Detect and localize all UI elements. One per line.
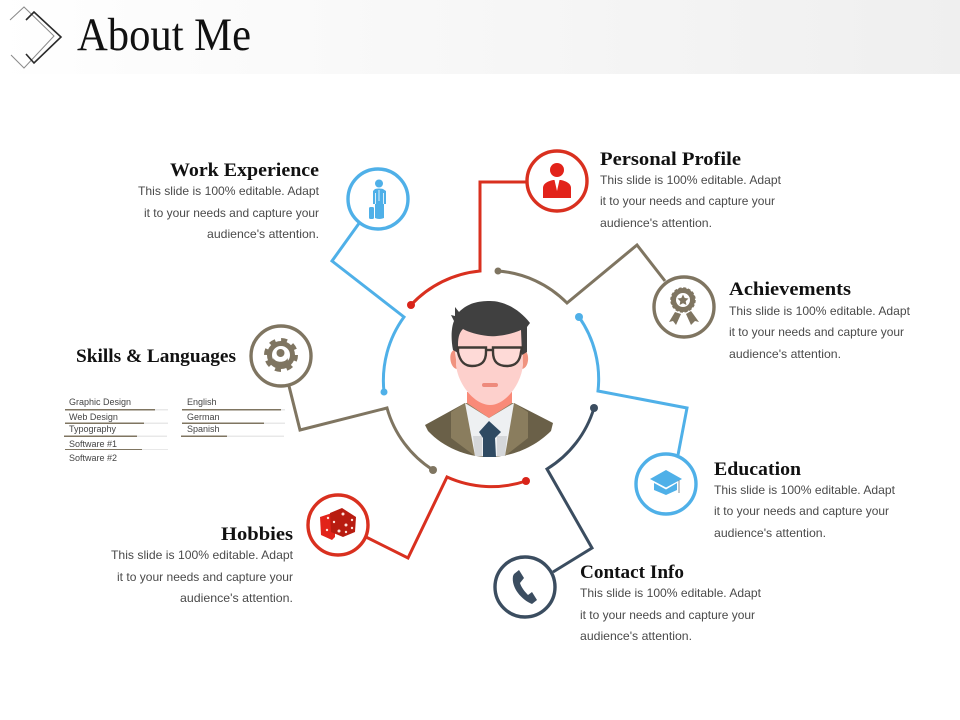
skills bars	[64, 397, 168, 463]
text block: achievements	[729, 280, 911, 361]
connector: hobbies (red)	[366, 477, 530, 558]
text block: work experience: audience's attention.	[207, 227, 319, 241]
text block: personal profile	[600, 150, 782, 230]
skills bars: Software #1	[69, 439, 117, 449]
text block: personal profile: This slide is 100% editable. Adapt	[600, 173, 782, 187]
mouth	[482, 383, 498, 387]
text block: education: Education	[714, 460, 802, 480]
text block: hobbies	[111, 525, 294, 605]
icon: education	[636, 454, 696, 514]
text block: education	[714, 460, 896, 540]
text block: work experience	[138, 161, 320, 241]
title: About Me	[77, 10, 251, 61]
heading: skills and languages: Skills & Languages	[76, 347, 236, 367]
connector: achievements (brown)	[494, 245, 665, 303]
text block: work experience: it to your needs and capture your	[144, 206, 319, 220]
text block: personal profile: audience's attention.	[600, 216, 712, 230]
connector: skills (brown)	[289, 386, 437, 474]
header band	[0, 0, 960, 74]
central portrait	[425, 301, 553, 457]
text block: education: This slide is 100% editable. Adapt	[714, 483, 896, 497]
text block: education: it to your needs and capture your	[714, 504, 889, 518]
text block: education: audience's attention.	[714, 526, 826, 540]
language bars: German	[187, 412, 220, 422]
text block: work experience: This slide is 100% editable. Adapt	[138, 184, 320, 198]
icon: hobbies dice	[308, 495, 368, 555]
glasses	[458, 348, 522, 366]
text block: achievements: Achievements	[729, 280, 851, 300]
icon: achievements	[654, 277, 714, 337]
logo: double chevron	[10, 7, 61, 68]
language bars: Spanish	[187, 424, 220, 434]
text block: achievements: it to your needs and capture your	[729, 325, 904, 339]
text block: personal profile: Personal Profile	[600, 150, 741, 170]
text block: contact info: audience's attention.	[580, 629, 692, 643]
ears	[450, 350, 528, 369]
face	[456, 325, 523, 405]
text block: hobbies: it to your needs and capture your	[117, 570, 293, 584]
neck	[467, 392, 512, 418]
skills bars: Typography	[69, 424, 117, 434]
lapels	[451, 403, 528, 456]
skills bars: Web Design	[69, 412, 118, 422]
icon: skills gear	[251, 326, 311, 386]
connector: personal profile (red)	[407, 182, 527, 309]
connector: contact info (navy)	[547, 404, 598, 572]
language bars	[181, 397, 285, 437]
skills bars: Graphic Design	[69, 397, 131, 407]
text block: contact info: it to your needs and capture your	[580, 608, 755, 622]
icon: work experience	[348, 169, 408, 229]
tie	[479, 421, 501, 457]
shirt shade	[473, 436, 507, 456]
shirt	[465, 403, 514, 456]
connector: education (blue)	[575, 313, 687, 455]
suit	[425, 403, 553, 457]
text block: achievements: This slide is 100% editable. Adapt	[729, 304, 911, 318]
text block: personal profile: it to your needs and capture your	[600, 194, 775, 208]
connector: work experience (blue)	[332, 222, 404, 396]
hair	[451, 301, 530, 355]
language bars: English	[187, 397, 217, 407]
text block: hobbies: This slide is 100% editable. Adapt	[111, 548, 294, 562]
text block: work experience: Work Experience	[170, 161, 319, 181]
icon: contact phone	[495, 557, 555, 617]
icon: personal profile	[527, 151, 587, 211]
text block: contact info: Contact Info	[580, 563, 684, 583]
text block: hobbies: audience's attention.	[180, 591, 293, 605]
text block: achievements: audience's attention.	[729, 347, 841, 361]
skills bars: Software #2	[69, 453, 117, 463]
text block: contact info: This slide is 100% editable. Adapt	[580, 586, 762, 600]
text block: contact info	[580, 563, 762, 643]
text block: hobbies: Hobbies	[221, 525, 293, 545]
